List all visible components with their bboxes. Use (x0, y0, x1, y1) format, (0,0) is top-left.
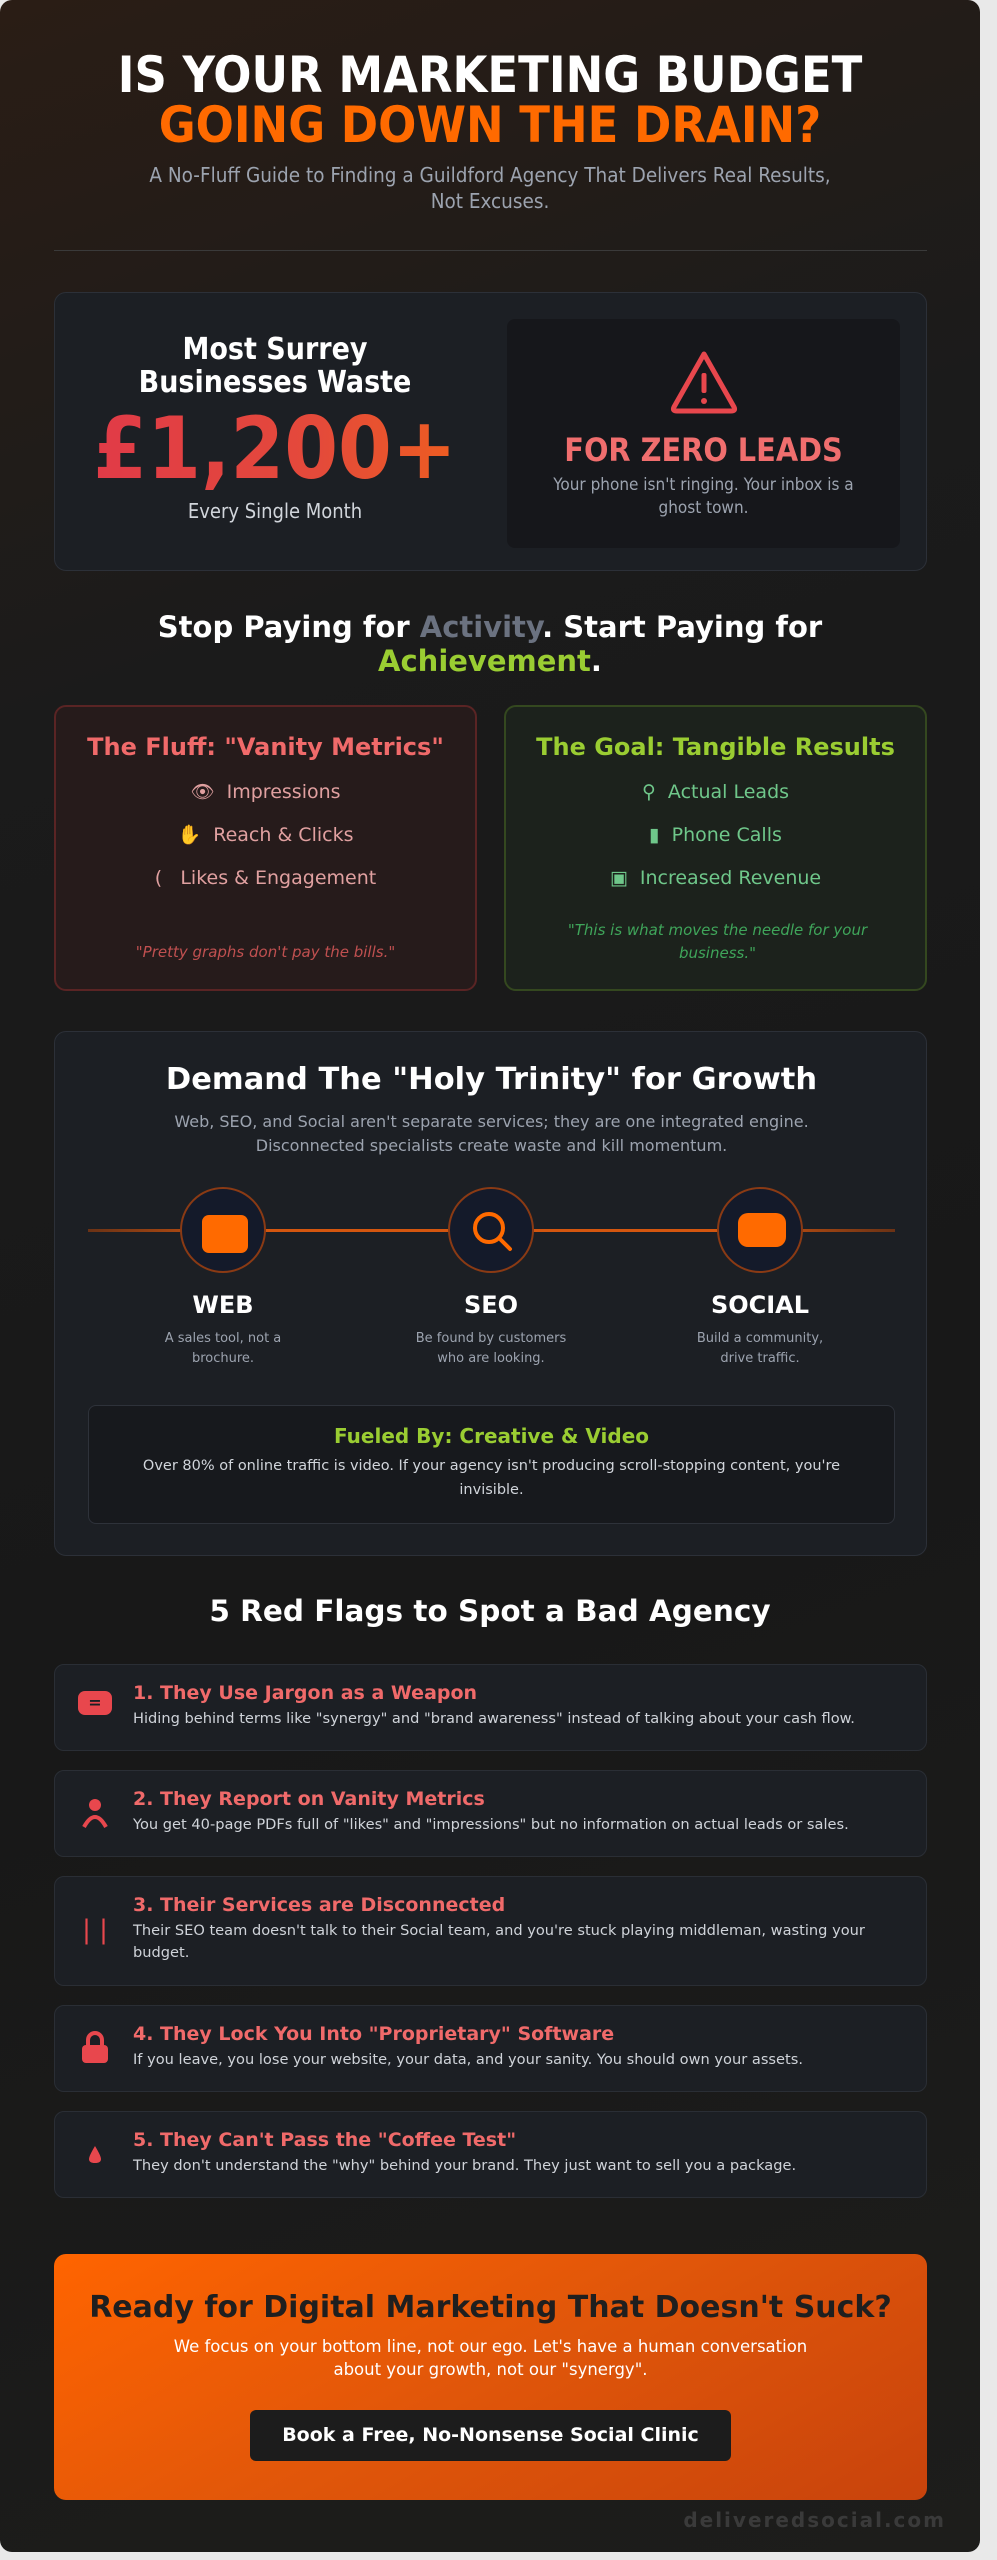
flag 2: You get 40-page PDFs full of "likes" and "impressions" but no information on actual leads or sales. (133, 1816, 849, 1833)
subtitle: A No-Fluff Guide to Finding a Guildford Agency That Delivers Real Results, (149, 163, 831, 187)
flag 3: 3. Their Services are Disconnected (133, 1894, 505, 1916)
stat text: Most Surrey (183, 332, 367, 367)
panel: fluff: ✋ Reach & Clicks (178, 824, 353, 846)
panel: holy trinity: Build a community, (697, 1331, 823, 1346)
flag 1 (54, 1664, 927, 1751)
panel: holy trinity (54, 1031, 927, 1556)
panel: goal: "This is what moves the needle for your business." (568, 921, 867, 962)
panel: fluff: The Fluff: "Vanity Metrics" (87, 733, 444, 761)
panel: holy trinity: SOCIAL (711, 1291, 809, 1319)
title: GOING DOWN THE DRAIN? (159, 96, 821, 154)
flag 3: Their SEO team doesn't talk to their Social team, and you're stuck playing middleman, wasting your budget. (133, 1922, 865, 1961)
panel: holy trinity: Disconnected specialists create waste and kill momentum. (256, 1136, 727, 1155)
title (118, 46, 862, 154)
icon: web (180, 1187, 266, 1273)
heading: activity vs achievement: Stop Paying for Activity. Start Paying for Achievement. (158, 610, 822, 678)
panel: holy trinity: drive traffic. (720, 1351, 800, 1366)
panel: stat (54, 292, 927, 571)
icon: social (717, 1187, 803, 1273)
panel: holy trinity: SEO (464, 1291, 518, 1319)
flag 4 (54, 2005, 927, 2092)
title: IS YOUR MARKETING BUDGET (118, 46, 862, 104)
panel: fluff: 👁 Impressions (190, 781, 341, 803)
panel: goal: ▮ Phone Calls (649, 824, 782, 846)
icon: seo (448, 1187, 534, 1273)
panel: holy trinity: Be found by customers (416, 1331, 566, 1346)
flag 3: | | (82, 1915, 108, 1945)
flag 4: If you leave, you lose your website, your data, and your sanity. You should own your assets. (133, 2051, 803, 2068)
flag 5 (54, 2111, 927, 2198)
footer: deliveredsocial.com (683, 2508, 946, 2532)
flag 3 (54, 1876, 927, 1986)
subtitle: Not Excuses. (431, 189, 549, 213)
flag 5: They don't understand the "why" behind your brand. They just want to sell you a package. (133, 2157, 796, 2174)
callout: fueled by: Fueled By: Creative & Video (334, 1424, 649, 1448)
icon: warning triangle (670, 352, 738, 414)
labels: WEB (192, 1291, 254, 1319)
panel: holy trinity: who are looking. (437, 1351, 545, 1366)
panel: fluff: "Pretty graphs don't pay the bills." (136, 943, 395, 961)
labels (164, 1291, 281, 1366)
warning box: Your phone isn't ringing. Your inbox is a ghost town. (553, 475, 854, 518)
flag 5: 5. They Can't Pass the "Coffee Test" (133, 2129, 516, 2151)
labels: A sales tool, not a (165, 1331, 281, 1346)
CTA panel: Ready for Digital Marketing That Doesn't Suck? (89, 2290, 892, 2325)
callout: fueled by: Over 80% of online traffic is video. If your agency isn't producing scroll-stopping content, you're invisible. (143, 1458, 840, 1498)
panel: goal: The Goal: Tangible Results (536, 733, 895, 761)
heading: red flags: 5 Red Flags to Spot a Bad Agency (209, 1594, 771, 1628)
panel: goal (504, 705, 927, 991)
panel: holy trinity: Web, SEO, and Social aren't separate services; they are one integrated engine. (174, 1112, 809, 1131)
flag 4: 4. They Lock You Into "Proprietary" Software (133, 2023, 614, 2045)
headline: zero leads: FOR ZERO LEADS (564, 431, 843, 469)
callout: fueled by (88, 1405, 895, 1524)
stat text: Businesses Waste (139, 365, 411, 400)
panel: holy trinity: Demand The "Holy Trinity" for Growth (166, 1062, 817, 1097)
stat text: Every Single Month (188, 499, 362, 523)
connector line (88, 1229, 895, 1232)
CTA panel: about your growth, not our "synergy". (333, 2360, 648, 2379)
panel: goal: ⚲ Actual Leads (642, 781, 789, 803)
subtitle (149, 163, 831, 213)
button: Book a Free, No-Nonsense Social Clinic (282, 2424, 699, 2446)
labels: brochure. (192, 1351, 254, 1366)
panel: goal: ▣ Increased Revenue (610, 867, 821, 889)
flag 1: = (88, 1693, 102, 1712)
warning box (507, 319, 900, 548)
CTA panel (54, 2254, 927, 2500)
flag 2 (54, 1770, 927, 1857)
panel: fluff (54, 705, 477, 991)
stat text (93, 332, 457, 523)
stat text: £1,200+ (93, 399, 457, 499)
button (250, 2410, 731, 2461)
flag 1: 1. They Use Jargon as a Weapon (133, 1682, 477, 1704)
CTA panel: We focus on your bottom line, not our ego. Let's have a human conversation (174, 2337, 807, 2356)
panel: fluff: ( Likes & Engagement (155, 867, 376, 889)
flag 1: Hiding behind terms like "synergy" and "brand awareness" instead of talking about your cash flow. (133, 1710, 855, 1727)
flag 2: 2. They Report on Vanity Metrics (133, 1788, 485, 1810)
